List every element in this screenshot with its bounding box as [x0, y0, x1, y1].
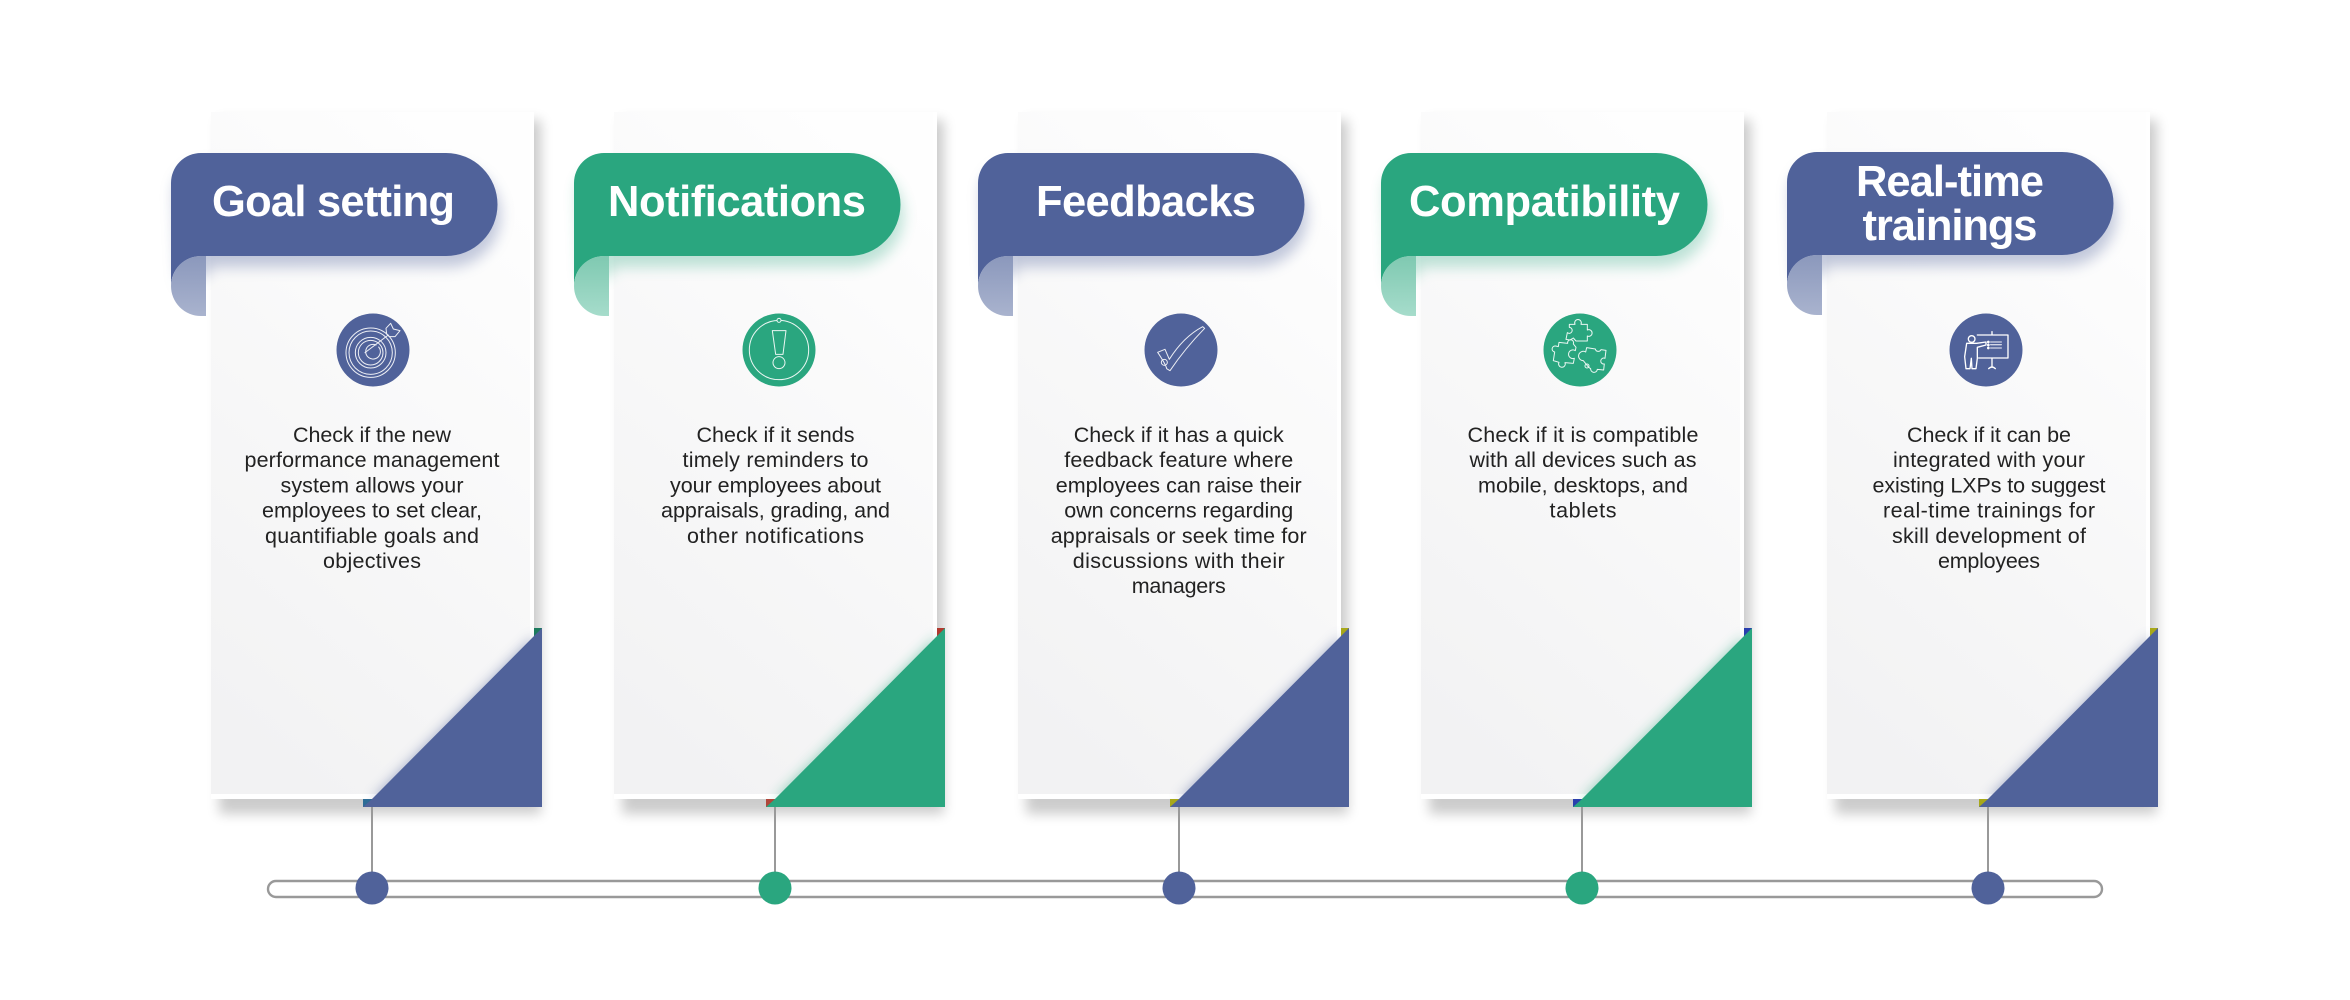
description text: managers	[1132, 574, 1226, 598]
description text: quantifiable goals and	[265, 524, 479, 548]
description text	[244, 423, 500, 573]
corner triangle	[1979, 628, 2158, 807]
card shadow	[219, 120, 541, 814]
card body	[614, 112, 937, 799]
icon: check mark	[1144, 314, 1218, 386]
description text: timely reminders to	[682, 448, 869, 472]
description text: Check if it has a quick	[1074, 423, 1284, 447]
timeline dot	[1162, 872, 1196, 904]
ribbon heading: Goal setting: Goal setting	[212, 178, 455, 226]
description text	[661, 423, 890, 548]
description text: Check if it is compatible	[1468, 423, 1698, 447]
card shadow	[1835, 120, 2157, 814]
ribbon heading: Feedbacks	[978, 153, 1308, 316]
description text: real-time trainings for	[1883, 499, 2095, 523]
ribbon heading: Compatibility	[1381, 153, 1710, 316]
card body	[211, 112, 534, 799]
panel: real-time trainings	[1787, 112, 2158, 904]
description text: tablets	[1550, 499, 1616, 523]
description text: own concerns regarding	[1064, 499, 1293, 523]
icon: exclamation mark	[742, 314, 816, 386]
corner triangle	[1573, 628, 1752, 807]
icon: puzzle pieces	[1544, 314, 1616, 386]
timeline dot	[1972, 872, 2004, 904]
ribbon heading: Compatibility: Compatibility	[1409, 178, 1680, 226]
card shadow	[1429, 120, 1751, 814]
ribbon heading: Notifications	[574, 153, 904, 316]
description text: mobile, desktops, and	[1478, 473, 1688, 497]
panel: compatibility	[1381, 112, 1752, 904]
description text: existing LXPs to suggest	[1872, 473, 2106, 497]
description text: Check if it sends	[696, 423, 854, 447]
ribbon heading: Goal setting	[171, 153, 500, 316]
card body	[1018, 112, 1341, 799]
connector stem	[1178, 807, 1180, 872]
panel: goal setting	[171, 112, 542, 904]
ribbon heading: Real-time trainings	[1787, 152, 2116, 315]
card body	[1421, 112, 1744, 799]
ribbon heading: Feedbacks: Feedbacks	[1036, 178, 1256, 226]
timeline dot	[1566, 872, 1598, 904]
description text: objectives	[323, 549, 421, 573]
description text: discussions with their	[1073, 549, 1285, 573]
timeline track	[268, 881, 2102, 897]
corner triangle	[363, 628, 542, 807]
description text: your employees about	[670, 473, 881, 497]
description text: employees to set clear,	[262, 499, 482, 523]
connector stem	[1581, 807, 1583, 872]
timeline dot	[758, 872, 792, 904]
description text: with all devices such as	[1468, 448, 1696, 472]
description text: skill development of	[1892, 524, 2086, 548]
connector stem	[1987, 807, 1989, 872]
description text: appraisals, grading, and	[661, 499, 890, 523]
panel: notifications	[574, 112, 945, 904]
icon: target with arrow	[336, 314, 410, 386]
description text	[1051, 423, 1307, 598]
description text: Check if the new	[293, 423, 451, 447]
panel: feedbacks	[978, 112, 1349, 904]
ribbon heading: Real-time trainings: Real-time	[1856, 158, 2044, 206]
description text	[1468, 423, 1698, 523]
connector stem	[371, 807, 373, 872]
description text: system allows your	[280, 473, 464, 497]
card body	[1827, 112, 2150, 799]
corner triangle	[766, 628, 945, 807]
description text: appraisals or seek time for	[1051, 524, 1307, 548]
description text: integrated with your	[1893, 448, 2085, 472]
description text: employees	[1938, 549, 2040, 573]
description text: employees can raise their	[1056, 473, 1302, 497]
ribbon heading: Real-time trainings: trainings	[1862, 202, 2038, 250]
corner triangle	[1170, 628, 1349, 807]
card shadow	[1026, 120, 1348, 814]
card shadow	[622, 120, 944, 814]
connector stem	[774, 807, 776, 872]
description text: other notifications	[687, 524, 864, 548]
timeline dot	[356, 872, 388, 904]
description text: feedback feature where	[1064, 448, 1293, 472]
description text	[1872, 423, 2106, 573]
description text: Check if it can be	[1907, 423, 2071, 447]
icon: presenter at board	[1950, 314, 2022, 386]
ribbon heading: Notifications: Notifications	[608, 178, 866, 226]
description text: performance management	[244, 448, 500, 472]
